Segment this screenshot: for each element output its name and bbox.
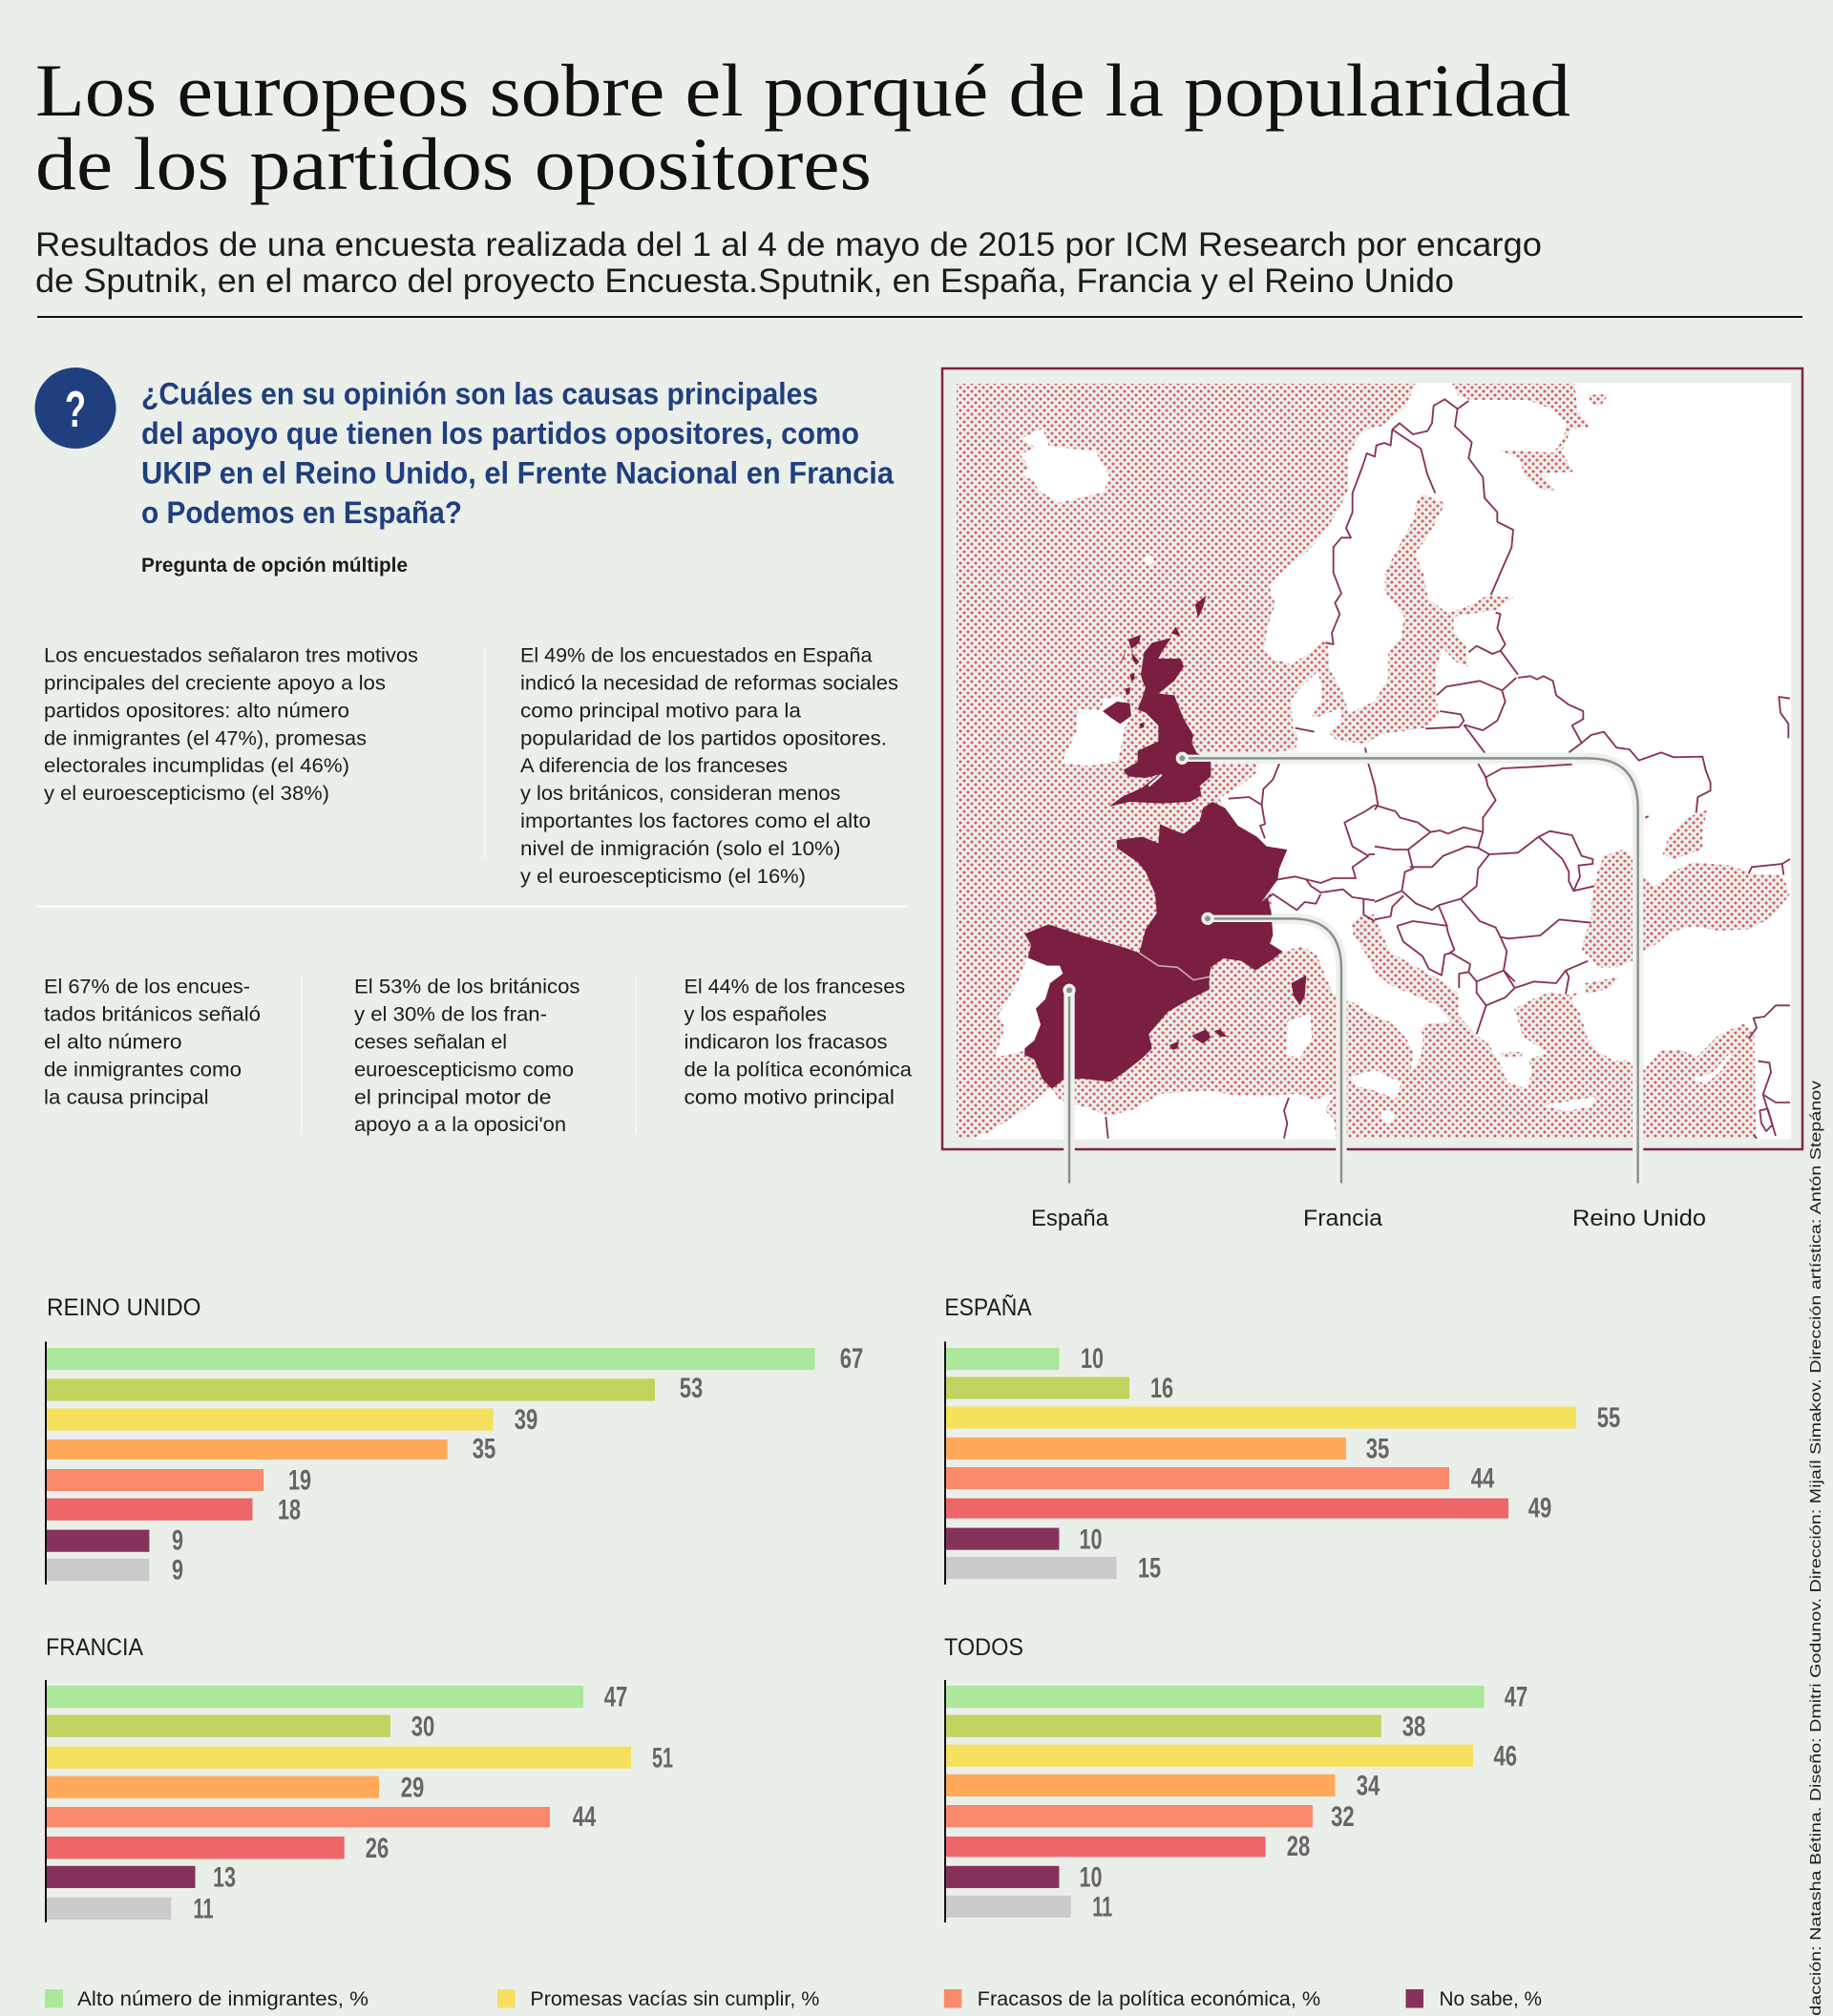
text block: Spain social reforms: como principal motivo para la <box>520 700 801 722</box>
icon: question mark: ? <box>65 381 86 438</box>
text block: Spain social reforms: indicó la necesidad de reformas sociales <box>520 672 898 694</box>
text block: Spain social reforms: importantes los factores como el alto <box>520 810 871 832</box>
title: Los europeos sobre el porqué de la popularidad <box>35 49 1570 132</box>
text block: British immigration: tados británicos señaló <box>44 1004 261 1025</box>
country: France <box>1117 802 1306 1005</box>
map labels: España <box>1031 1206 1109 1231</box>
bar chart: Todos: 10 <box>1079 1862 1102 1894</box>
bar chart: Reino Unido: 67 <box>840 1343 863 1375</box>
bar chart: Reino Unido: 19 <box>288 1465 311 1497</box>
bar chart: Todos: 46 <box>1493 1741 1517 1773</box>
text block: euroscepticism: apoyo a a la oposici'on <box>354 1114 566 1136</box>
legend: Promesas vacías sin cumplir, % <box>530 1988 819 2010</box>
bar chart: Reino Unido: 9 <box>172 1525 183 1557</box>
subtitle: de Sputnik, en el marco del proyecto Encuesta.Sputnik, en España, Francia y el Reino Unido <box>35 262 1454 300</box>
text block: euroscepticism: euroescepticismo como <box>354 1059 574 1081</box>
text block: Spain social reforms: popularidad de los partidos opositores. <box>520 727 887 749</box>
bar chart: Reino Unido <box>45 1294 863 1586</box>
bar chart: España: 49 <box>1528 1493 1551 1524</box>
text block: British immigration: el alto número <box>44 1031 181 1053</box>
bar chart: Francia: 26 <box>366 1833 389 1864</box>
question note: Pregunta de opción múltiple <box>141 555 408 577</box>
title <box>35 49 1570 205</box>
bar chart: Todos: 11 <box>1092 1892 1112 1923</box>
text block: euroscepticism: ceses señalan el <box>354 1031 507 1053</box>
bar chart: España: 10 <box>1079 1523 1102 1555</box>
legend <box>45 1988 1542 2010</box>
country: United Kingdom <box>1103 596 1211 807</box>
bar chart: España: 15 <box>1138 1553 1161 1585</box>
question heading: UKIP en el Reino Unido, el Frente Nacional en Francia <box>141 456 894 491</box>
bar chart: Reino Unido: 53 <box>680 1373 703 1404</box>
leader lines <box>1063 752 1638 1184</box>
text block: Spain social reforms: A diferencia de los franceses <box>520 755 788 777</box>
bar chart: Todos <box>944 1634 1528 1923</box>
text block: three main reasons: partidos opositores: alto número <box>44 700 349 722</box>
bar chart: España <box>944 1293 1620 1585</box>
leader line halos <box>1069 758 1638 1153</box>
legend: No sabe, % <box>1440 1988 1542 2010</box>
inland seas <box>1499 394 1790 1057</box>
bar chart: Todos: 47 <box>1505 1682 1528 1713</box>
text block: economic policy: indicaron los fracasos <box>684 1031 888 1053</box>
panel: map of Europe <box>942 368 1802 1184</box>
bar chart: España: ESPAÑA <box>944 1293 1032 1321</box>
bar chart: Francia: FRANCIA <box>46 1634 143 1661</box>
bar chart: Todos: TODOS <box>944 1634 1023 1661</box>
text block: British immigration <box>44 976 261 1108</box>
bar chart: Todos: 32 <box>1331 1801 1355 1833</box>
question heading: o Podemos en España? <box>141 495 462 530</box>
text block: Spain social reforms: El 49% de los encuestados en España <box>520 645 873 666</box>
bar chart: Francia: 30 <box>411 1712 434 1743</box>
bar chart: Francia: 29 <box>401 1773 424 1804</box>
text block: euroscepticism: el principal motor de <box>354 1086 552 1108</box>
bar chart: Todos: 34 <box>1357 1771 1380 1802</box>
text block: economic policy <box>684 976 912 1108</box>
text block: three main reasons <box>44 645 418 805</box>
bar chart: España: 10 <box>1081 1343 1104 1375</box>
text block: British immigration: El 67% de los encues- <box>44 976 250 998</box>
subtitle <box>35 226 1542 300</box>
text block: Spain social reforms <box>520 645 898 888</box>
bar chart: Todos: 38 <box>1402 1712 1425 1743</box>
text block: Spain social reforms: y el euroescepticismo (el 16%) <box>520 866 806 888</box>
text block: economic policy: El 44% de los franceses <box>684 976 905 998</box>
text block: three main reasons: de inmigrantes (el 47%), promesas <box>44 727 367 749</box>
bar chart: España: 16 <box>1150 1373 1173 1404</box>
bar chart: Francia: 47 <box>604 1682 627 1713</box>
bar chart: Francia: 51 <box>652 1743 673 1774</box>
text block: three main reasons: electorales incumplidas (el 46%) <box>44 755 349 777</box>
text block: three main reasons: Los encuestados señalaron tres motivos <box>44 645 418 666</box>
bar chart: Francia: 13 <box>213 1862 236 1894</box>
text block: economic policy: y los españoles <box>684 1004 827 1025</box>
country: Spain <box>1024 924 1227 1089</box>
bar chart: Reino Unido: 39 <box>515 1404 537 1436</box>
bar chart: Reino Unido: 9 <box>172 1555 183 1586</box>
map labels: Francia <box>1303 1206 1383 1231</box>
bar chart: España: 35 <box>1366 1434 1389 1465</box>
bar chart: España: 55 <box>1597 1402 1620 1434</box>
question heading: ¿Cuáles en su opinión son las causas principales <box>141 376 818 410</box>
bar chart: Reino Unido: REINO UNIDO <box>47 1294 200 1321</box>
bar chart: Francia: 11 <box>193 1894 214 1925</box>
bar chart: Francia <box>45 1634 673 1925</box>
text block: three main reasons: y el euroescepticismo (el 38%) <box>44 783 329 805</box>
question heading: del apoyo que tienen los partidos opositores, como <box>141 416 859 451</box>
text block: economic policy: como motivo principal <box>684 1086 895 1108</box>
subtitle: Resultados de una encuesta realizada del 1 al 4 de mayo de 2015 por ICM Research por encargo <box>35 226 1542 263</box>
text block: euroscepticism: El 53% de los británicos <box>354 976 580 998</box>
text block: British immigration: de inmigrantes como <box>44 1059 242 1081</box>
bar chart: España: 44 <box>1471 1463 1494 1495</box>
map labels: Reino Unido <box>1572 1206 1706 1231</box>
national borders <box>1106 399 1790 1139</box>
text block: three main reasons: principales del creciente apoyo a los <box>44 672 386 694</box>
bar chart: Reino Unido: 35 <box>473 1434 495 1465</box>
bar chart: Reino Unido: 18 <box>278 1495 301 1526</box>
bar chart: Francia: 44 <box>573 1801 596 1833</box>
bar chart: Todos: 28 <box>1287 1831 1310 1862</box>
text block: British immigration: la causa principal <box>44 1086 209 1108</box>
text block: euroscepticism <box>354 976 580 1136</box>
legend: Fracasos de la política económica, % <box>978 1988 1320 2010</box>
text block: euroscepticism: y el 30% de los fran- <box>354 1004 547 1025</box>
text block: Spain social reforms: nivel de inmigración (solo el 10%) <box>520 838 840 860</box>
legend: Alto número de inmigrantes, % <box>77 1988 369 2010</box>
title: de los partidos opositores <box>35 122 872 205</box>
text block: economic policy: de la política económica <box>684 1059 912 1081</box>
map labels <box>1031 1206 1706 1231</box>
icon: question mark <box>34 368 116 449</box>
text block: Spain social reforms: y los británicos, consideran menos <box>520 783 840 805</box>
question heading <box>141 376 894 530</box>
